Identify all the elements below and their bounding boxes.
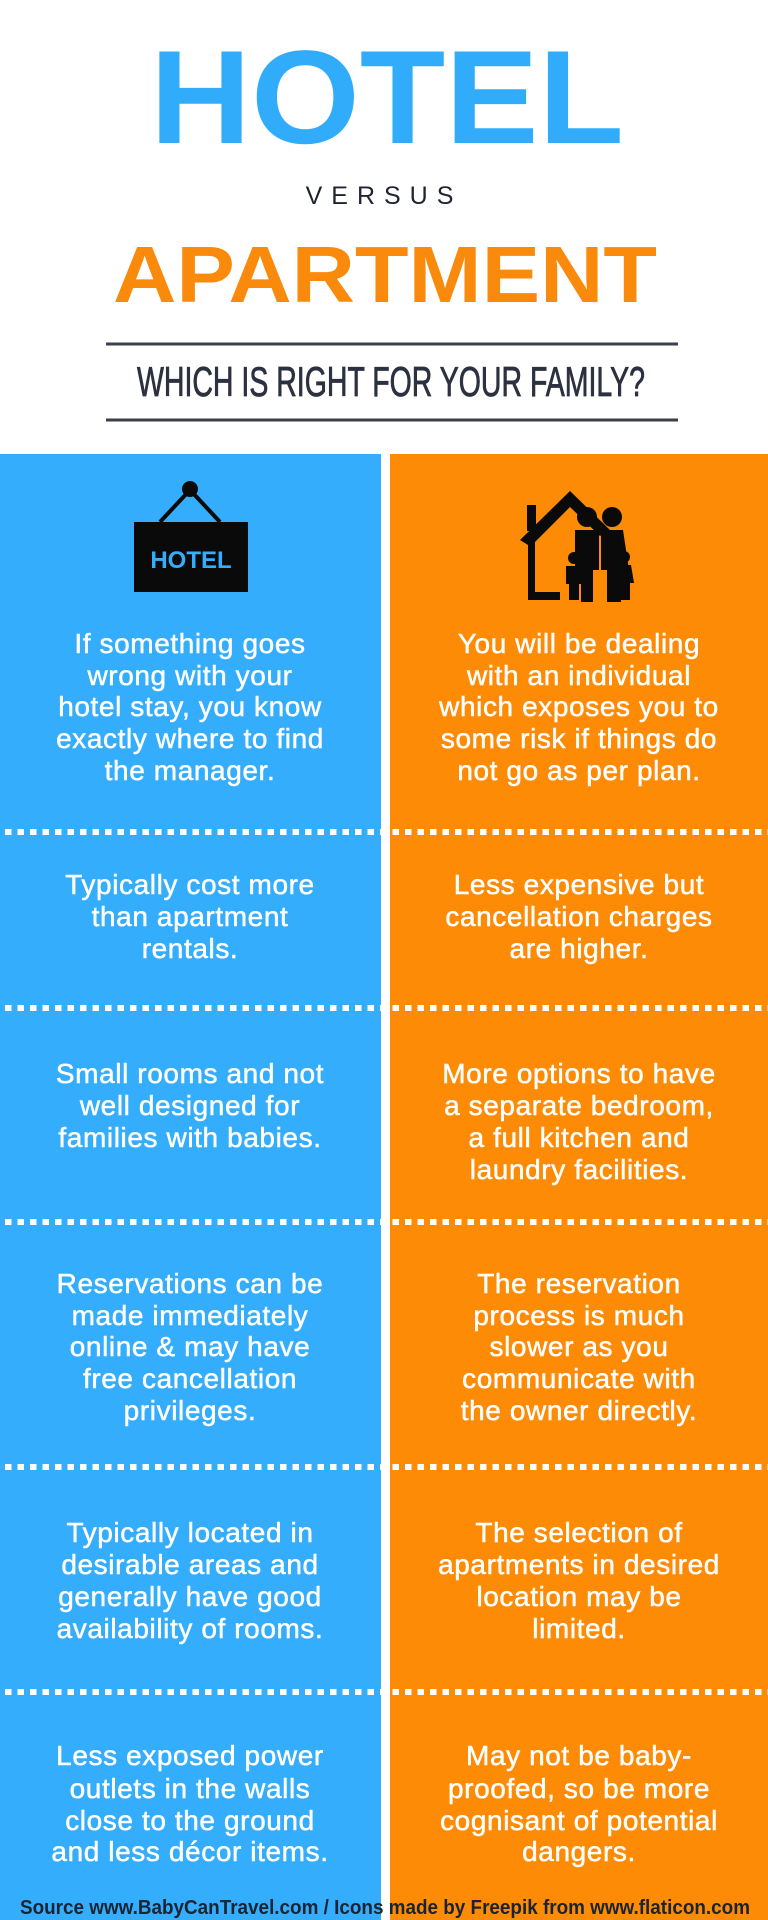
text: hotel row 6: outlets in the walls [70,1773,310,1804]
text: hotel row 5: generally have good [58,1581,322,1612]
text: apartment row 6: dangers. [522,1836,636,1867]
text: apartment row 1: some risk if things do [441,723,717,754]
text: apartment row 5: apartments in desired [438,1549,720,1580]
panel: apartment column [390,454,768,1920]
text: hotel row 5: desirable areas and [61,1549,319,1580]
text: apartment row 4: communicate with [462,1363,696,1394]
text: hotel row 3: Small rooms and not [56,1058,324,1089]
text: hotel row 2: rentals. [142,933,238,964]
text: apartment row 6: proofed, so be more [448,1773,710,1804]
text: hotel row 6 [51,1740,329,1867]
text: apartment row 4: process is much [473,1300,685,1331]
text: apartment row 3: More options to have [442,1058,716,1089]
text: apartment row 4: the owner directly. [461,1395,697,1426]
text: hotel row 4 [57,1268,323,1426]
text: apartment row 5: The selection of [475,1517,683,1548]
icon: hotel sign [134,481,248,592]
text: apartment row 3: a full kitchen and [469,1122,689,1153]
icon: family house [520,491,634,602]
text: apartment row 5: location may be [476,1581,682,1612]
text: apartment row 3 [442,1058,716,1185]
text: hotel row 5 [57,1517,323,1644]
text: hotel row 2 [65,869,315,964]
text: hotel row 5: availability of rooms. [57,1613,323,1644]
text: apartment row 2: cancellation charges [445,901,713,932]
text: apartment row 2 [445,869,713,964]
text: apartment row 6: May not be baby- [466,1740,692,1771]
text: hotel row 4: free cancellation [83,1363,297,1394]
text: hotel row 2: than apartment [92,901,288,932]
text: apartment row 1 [438,628,719,786]
text: hotel row 6: and less décor items. [51,1836,329,1867]
text: apartment row 1: not go as per plan. [457,755,701,786]
text: hotel row 4: privileges. [124,1395,256,1426]
text: hotel row 4: Reservations can be [57,1268,323,1299]
text: apartment row 1: with an individual [466,660,691,691]
text: hotel row 1: wrong with your [86,660,293,691]
text: hotel row 2: Typically cost more [65,869,315,900]
text: hotel row 4: made immediately [72,1300,308,1331]
title: VERSUS: VERSUS [306,182,462,210]
text: hotel row 1: If something goes [74,628,306,659]
text: apartment row 4: slower as you [490,1331,668,1362]
text: apartment row 3: laundry facilities. [470,1154,688,1185]
title: APARTMENT: APARTMENT [113,230,657,319]
text: hotel row 6: close to the ground [65,1805,315,1836]
text: apartment row 2: Less expensive but [454,869,704,900]
text: hotel row 1: exactly where to find [56,723,324,754]
text: hotel row 3 [56,1058,324,1153]
text: apartment row 1: which exposes you to [438,691,719,722]
text: hotel row 1 [56,628,324,786]
text: apartment row 5 [438,1517,720,1644]
text: hotel row 1: the manager. [105,755,275,786]
text: apartment row 6: cognisant of potential [440,1805,718,1836]
text: hotel row 5: Typically located in [66,1517,314,1548]
text: hotel row 3: well designed for [79,1090,300,1121]
text: apartment row 2: are higher. [510,933,648,964]
text: apartment row 3: a separate bedroom, [444,1090,714,1121]
icon: hotel sign: HOTEL [150,547,232,574]
title: HOTEL: HOTEL [150,24,624,172]
text: apartment row 1: You will be dealing [458,628,700,659]
text: hotel row 3: families with babies. [58,1122,322,1153]
text: apartment row 5: limited. [532,1613,626,1644]
text: apartment row 4 [461,1268,697,1426]
text: apartment row 6 [440,1740,718,1867]
text: hotel row 1: hotel stay, you know [58,691,322,722]
panel: hotel column [0,454,381,1920]
text: apartment row 4: The reservation [477,1268,681,1299]
text: hotel row 6: Less exposed power [56,1740,324,1771]
text: hotel row 4: online & may have [70,1331,310,1362]
